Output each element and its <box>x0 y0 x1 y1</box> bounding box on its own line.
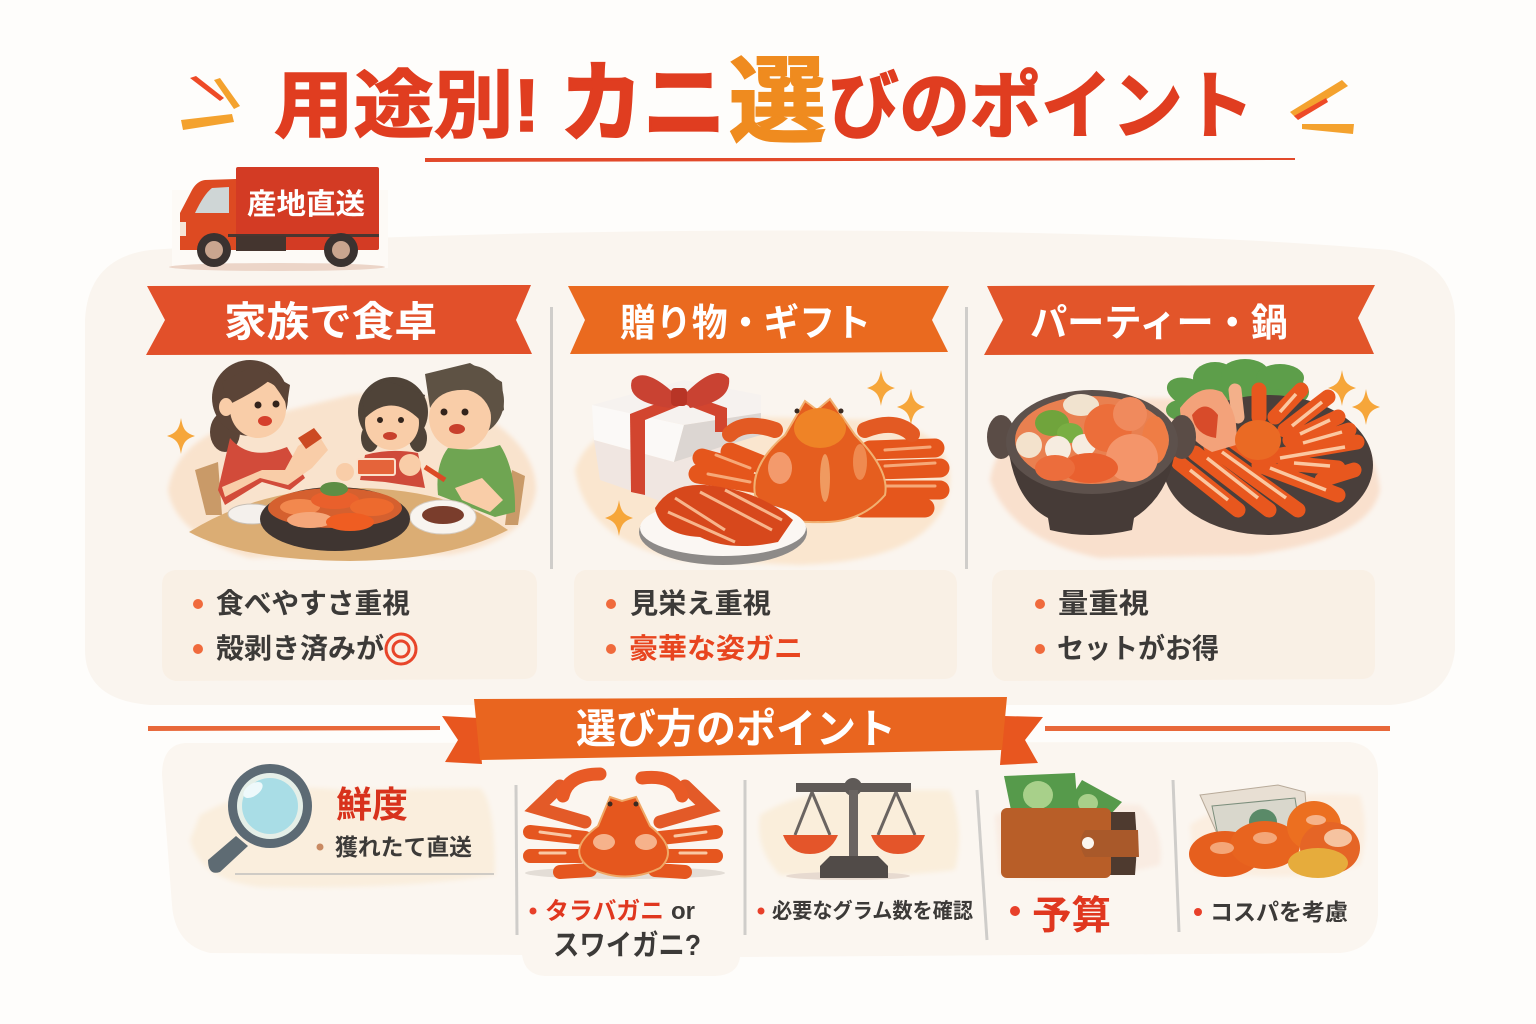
text: or: or <box>671 898 695 925</box>
section rule left <box>148 726 440 731</box>
icon: cash and crab shells <box>1189 785 1360 878</box>
item: freshness <box>190 764 495 888</box>
title text: カニ: カニ <box>560 54 726 153</box>
item: weight <box>758 778 973 923</box>
child <box>336 377 428 488</box>
title <box>181 49 1354 162</box>
divider <box>1173 780 1179 932</box>
title underline <box>425 158 1295 162</box>
ribbon heading: gift <box>568 286 949 354</box>
crab leg pieces <box>1179 389 1357 510</box>
panel: gift bullets: 見栄え重視 <box>630 588 771 619</box>
item: cost performance <box>1189 785 1365 925</box>
truck label: 産地直送 <box>247 188 365 221</box>
panel: party bullets <box>992 570 1375 681</box>
ribbon heading: family: 家族で食卓 <box>224 299 437 345</box>
illustration: family eating crab <box>167 360 536 561</box>
divider <box>977 790 987 940</box>
plate with crab legs <box>639 485 807 565</box>
icon: snow crab <box>525 774 725 879</box>
panel: family bullets <box>162 570 537 681</box>
ribbon heading: party <box>984 285 1375 355</box>
panel: family bullets: 食べやすさ重視 <box>216 588 410 619</box>
section ribbon: selection points: 選び方のポイント <box>576 706 896 752</box>
platter <box>1163 395 1373 535</box>
chair right <box>505 470 525 525</box>
ribbon heading: family <box>146 285 532 355</box>
divider <box>744 780 746 935</box>
whole crab <box>698 399 940 522</box>
panel: party bullets: 量重視 <box>1058 588 1149 619</box>
divider <box>550 307 553 569</box>
panel: gift bullets <box>574 570 957 681</box>
divider <box>516 785 517 935</box>
item: crab variety <box>525 774 725 962</box>
title text: 用途別: 用途別! <box>274 64 540 147</box>
illustration: gift and crab <box>575 370 950 565</box>
heading: freshness: 鮮度 <box>336 784 408 825</box>
title decoration: right burst <box>1290 80 1354 134</box>
text: weight: 必要なグラム数を確認 <box>772 899 973 923</box>
panel: party bullets: セットがお得 <box>1057 632 1219 664</box>
crab legs <box>698 425 940 508</box>
icon: magnifying glass <box>208 764 312 873</box>
panel: family bullets: 殻剥き済みが <box>216 632 384 664</box>
divider <box>965 307 968 569</box>
icon: wallet with cash <box>1001 773 1139 878</box>
table with pan of crab <box>189 482 508 561</box>
text: king crab: タラバガニ <box>545 898 664 925</box>
father <box>425 363 515 517</box>
text: freshness detail: 獲れたて直送 <box>335 834 472 860</box>
icon: balance scale <box>783 778 925 880</box>
gift box <box>592 373 761 503</box>
title decoration: left burst <box>181 76 241 130</box>
text: cost performance: コスパを考慮 <box>1210 899 1348 925</box>
panel: use cases background <box>85 230 1455 705</box>
double circle mark <box>386 634 416 664</box>
title text: びのポイント: びのポイント <box>828 65 1254 148</box>
title text: 選: 選 <box>729 49 826 154</box>
panel: gift bullets: 豪華な姿ガニ <box>629 633 803 664</box>
chair left <box>195 462 222 515</box>
ribbon heading: gift: 贈り物・ギフト <box>620 303 871 345</box>
section rule right <box>1045 726 1390 731</box>
panel: selection points background <box>162 742 1378 976</box>
text: snow crab: スワイガニ? <box>553 929 701 962</box>
clay pot <box>987 390 1196 535</box>
mother <box>210 360 328 505</box>
section ribbon: selection points <box>442 697 1043 765</box>
ribbon heading: party: パーティー・鍋 <box>1030 303 1288 345</box>
leaves <box>1163 359 1309 420</box>
delivery truck icon <box>169 167 388 271</box>
text: budget: 予算 <box>1032 895 1111 938</box>
item: budget <box>995 773 1161 938</box>
illustration: hot pot and crab platter <box>987 359 1380 558</box>
